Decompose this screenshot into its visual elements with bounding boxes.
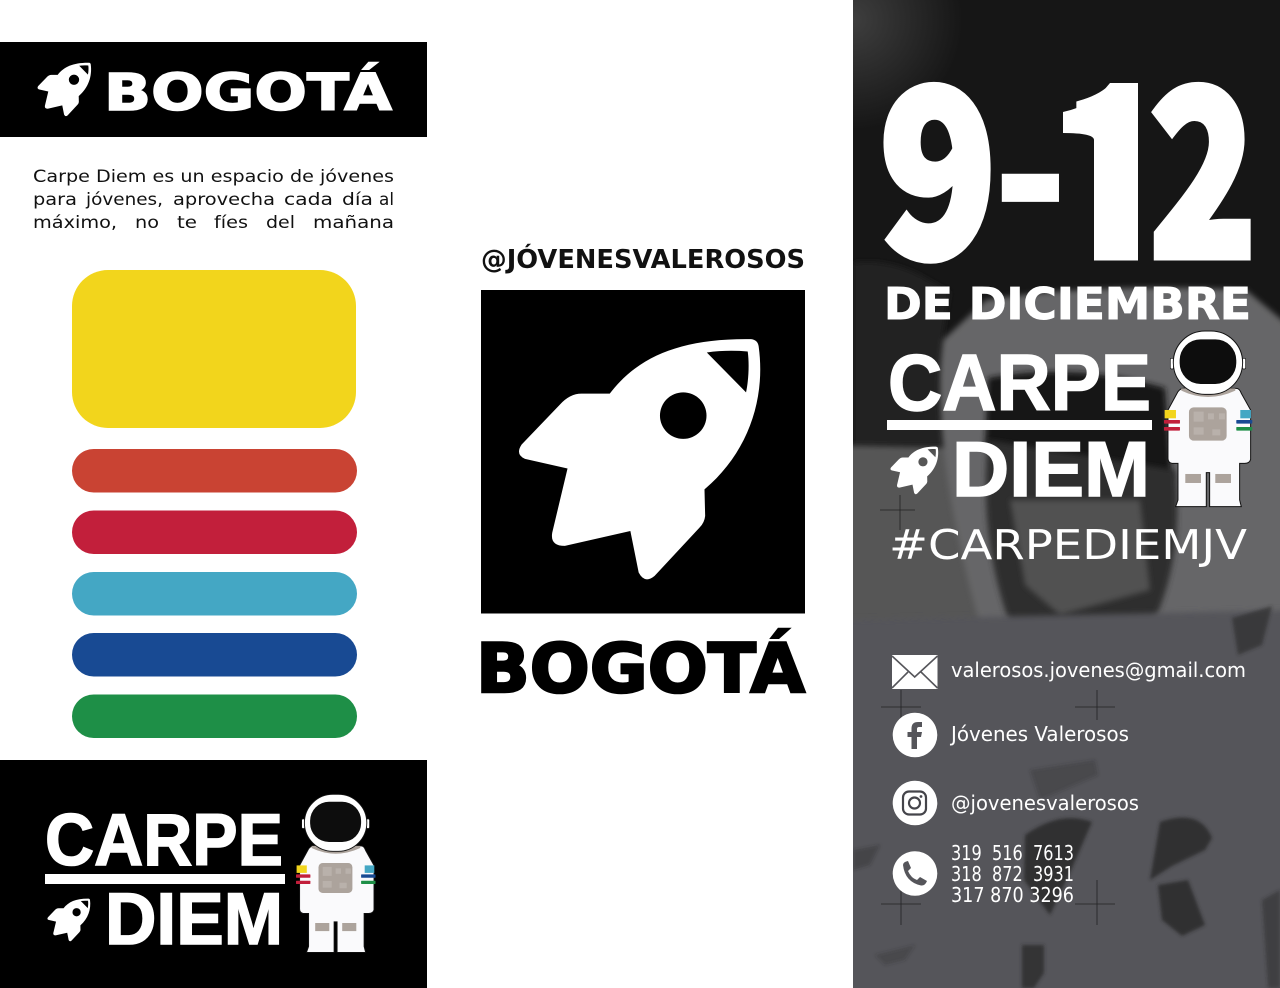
- swatch: blue: [72, 633, 357, 676]
- text: phone numbers: 317 870 3296: [951, 883, 1074, 907]
- text block: description: mañana: [313, 213, 394, 233]
- text block: description: te: [177, 213, 197, 233]
- text block: description: día: [342, 190, 373, 210]
- contact: instagram: [893, 781, 1139, 825]
- text: CARPE: CARPE: [888, 338, 1151, 427]
- text: phone numbers: 319 516 7613: [951, 841, 1074, 865]
- icon: instagram: [893, 781, 937, 825]
- contact: email: [892, 655, 1246, 689]
- chart: colour swatches: [72, 270, 357, 738]
- panel: right event column: [840, 0, 1280, 988]
- contact: phones: [893, 841, 1074, 907]
- icon: small rocket: [890, 447, 938, 494]
- text: DIEM: DIEM: [952, 425, 1150, 513]
- icon: small rocket: [47, 899, 90, 941]
- text block: description: [33, 167, 394, 233]
- text: phone numbers: 318 872 3931: [951, 862, 1074, 886]
- text block: description: no: [135, 213, 159, 233]
- panel: left top banner: [0, 42, 427, 137]
- icon: large rocket: [519, 339, 760, 579]
- heading: Bogotá banner: BOGOTÁ: [104, 62, 393, 123]
- text: phone numbers: [951, 841, 1074, 907]
- date: 9-12: [883, 82, 1251, 264]
- divider bar: [45, 874, 285, 884]
- panel: central rocket logo: [481, 290, 805, 614]
- text: hashtag: #CARPEDIEMJV: [889, 521, 1247, 569]
- icon: facebook: [893, 713, 937, 757]
- divider bar: [887, 420, 1152, 430]
- text block: description: cada: [284, 190, 333, 210]
- icon: rocket in banner: [38, 63, 91, 116]
- text block: description: del: [266, 213, 295, 233]
- text: facebook name: Jóvenes Valerosos: [949, 722, 1129, 746]
- text block: description: aprovecha: [173, 190, 275, 210]
- icon: phone: [893, 851, 937, 896]
- text block: description: jóvenes,: [85, 190, 163, 210]
- swatch: yellow: [72, 270, 356, 428]
- heading: handle: @JÓVENESVALEROSOS: [481, 243, 805, 275]
- logo: Carpe Diem: [887, 331, 1252, 513]
- text block: description: Carpe Diem es un espacio de jóvenes: [33, 167, 394, 187]
- photo background: [840, 0, 1280, 988]
- icon: astronaut: [296, 794, 376, 952]
- panel: Carpe Diem logo block: [0, 760, 427, 988]
- text: CARPE: CARPE: [45, 800, 283, 881]
- contact: facebook: [893, 713, 1129, 757]
- text: DIEM: DIEM: [105, 879, 283, 960]
- swatch: orange red: [72, 449, 357, 492]
- text block: description: para: [33, 190, 77, 210]
- heading: Bogotá central: BOGOTÁ: [476, 629, 805, 709]
- date: 9-12: -: [993, 36, 1068, 300]
- text block: description: fíes: [214, 213, 248, 233]
- icon: astronaut: [1164, 331, 1252, 507]
- swatch: teal: [72, 572, 357, 616]
- swatch: green: [72, 694, 357, 738]
- text block: description: máximo,: [33, 213, 117, 233]
- text: de diciembre: DE DICIEMBRE: [884, 279, 1251, 330]
- text block: description: al: [379, 190, 394, 210]
- text: email address: valerosos.jovenes@gmail.com: [951, 658, 1246, 682]
- text: instagram handle: @jovenesvalerosos: [951, 791, 1139, 815]
- icon: envelope: [892, 655, 938, 689]
- swatch: crimson: [72, 510, 357, 554]
